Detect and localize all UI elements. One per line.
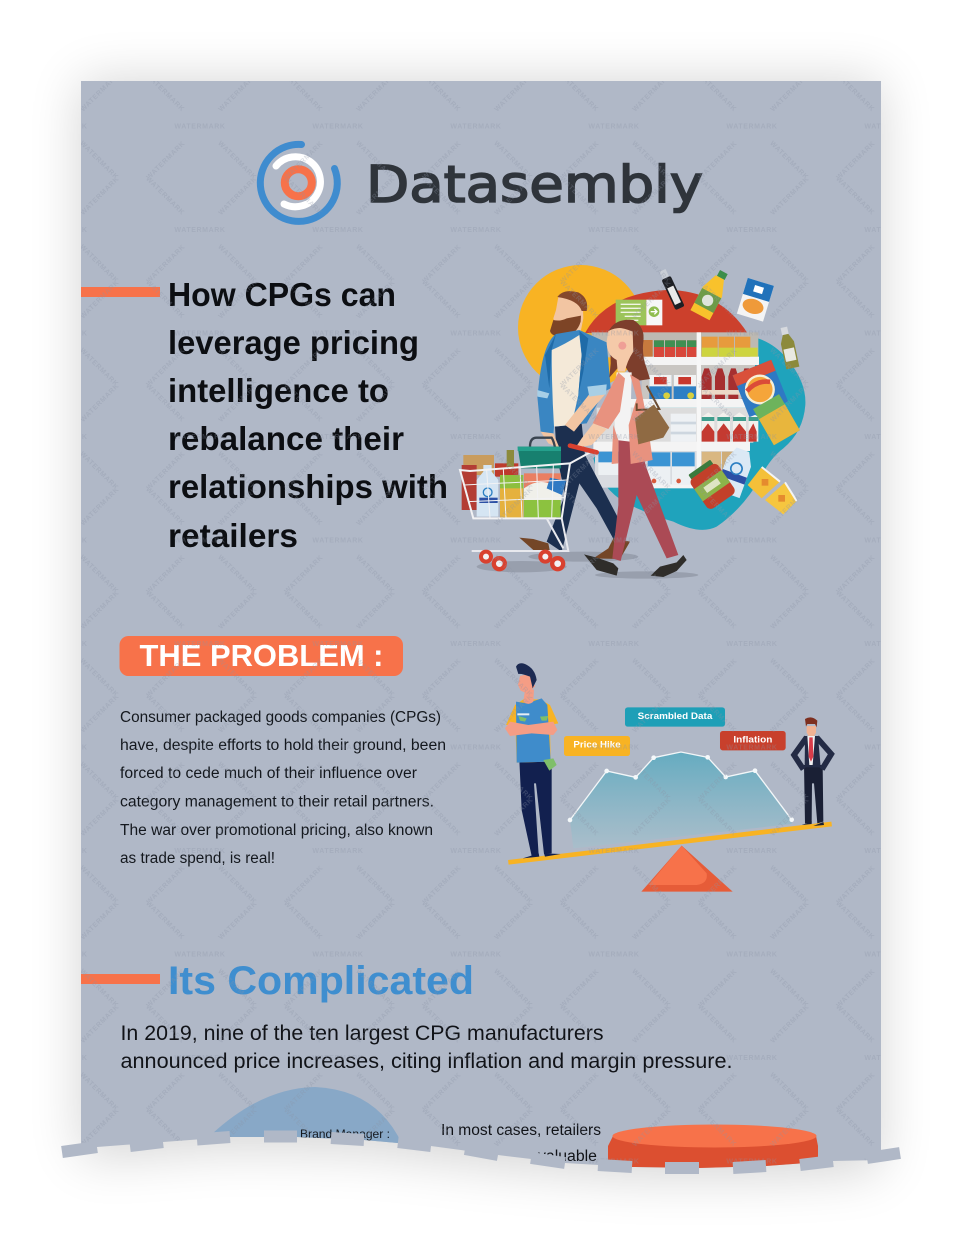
data area chart	[568, 752, 794, 848]
worried man: head	[807, 726, 816, 736]
accent bar: title	[81, 287, 160, 297]
man: cuffs	[587, 384, 607, 397]
label: price hike: Price Hike	[573, 740, 621, 750]
products row 1	[643, 337, 758, 357]
label: scrambled data: Scrambled Data	[638, 711, 713, 721]
man: lapel	[545, 331, 588, 395]
man: hair	[557, 291, 587, 311]
confident man: legs	[519, 760, 552, 856]
shelf sign	[616, 300, 662, 325]
confident man: arms	[505, 722, 557, 736]
products row 4	[598, 452, 740, 484]
man: forearm and hands	[565, 393, 606, 432]
ground shadows	[477, 552, 698, 579]
accent bar: complicated	[81, 974, 160, 984]
red disc	[608, 1124, 818, 1170]
label: scrambled data	[625, 707, 725, 727]
man: face and neck	[553, 297, 584, 331]
label: inflation	[720, 731, 786, 750]
intro paragraph: announced price increases, citing inflation and margin pressure.	[120, 1050, 732, 1073]
man: beard	[550, 316, 581, 337]
seesaw fulcrum	[641, 846, 733, 892]
woman: blouse	[613, 372, 632, 442]
products row 2	[649, 368, 752, 399]
title	[168, 276, 448, 554]
woman: shoes	[584, 554, 687, 577]
paper drop shadow	[81, 81, 881, 1176]
floating: juice bottle	[690, 270, 728, 320]
problem body text: have, despite efforts to hold their ground, been	[120, 737, 446, 754]
woman	[575, 320, 687, 577]
yellow sun circle	[518, 265, 634, 383]
handbag	[637, 386, 659, 410]
text: retailers: In most cases, retailers	[441, 1122, 601, 1139]
problem body text	[120, 709, 446, 867]
title: leverage pricing	[168, 324, 419, 361]
confident man: money	[543, 758, 557, 771]
confident man: shirt	[506, 699, 558, 763]
label: price hike	[564, 736, 630, 756]
title: retailers	[168, 517, 298, 554]
cart: products	[462, 450, 566, 518]
problem body text: Consumer packaged goods companies (CPGs)	[120, 709, 441, 726]
shopping cart	[460, 446, 597, 571]
title: intelligence to	[168, 372, 389, 409]
red dome	[585, 290, 747, 333]
man	[519, 291, 630, 559]
seesaw plank	[508, 824, 832, 862]
woman: trousers	[612, 440, 678, 561]
man: shoes	[519, 538, 630, 559]
problem body text: forced to cede much of their influence over	[120, 765, 417, 782]
confident man	[505, 663, 561, 858]
title: relationships with	[168, 468, 448, 505]
text: retailers	[441, 1122, 601, 1165]
wordmark: Datasembly	[366, 156, 703, 215]
floating: yellow boxes	[748, 467, 797, 514]
floating: pastry packet	[737, 278, 774, 322]
heading: its complicated: Its Complicated	[168, 959, 474, 1003]
cart: handle	[570, 446, 597, 452]
illustration: pricing seesaw	[505, 663, 832, 892]
problem body text: category management to their retail partners.	[120, 794, 434, 810]
logo	[260, 144, 703, 221]
products row 3	[671, 412, 758, 442]
woman: hair front	[608, 320, 644, 342]
watermark overlay	[81, 81, 881, 1171]
man: trousers	[547, 423, 618, 552]
green basket	[518, 438, 561, 468]
title: rebalance their	[168, 420, 404, 457]
teal blob	[593, 335, 805, 530]
label: brand manager: Brand Manager :	[300, 1127, 390, 1141]
floating: oil bottle	[780, 326, 800, 370]
worried man	[794, 717, 831, 826]
floating: black bottle	[658, 268, 685, 310]
blue hill	[212, 1087, 403, 1160]
cart: basket wires	[460, 452, 590, 551]
text: retailers: valuable	[538, 1148, 597, 1165]
label: inflation: Inflation	[733, 735, 772, 745]
shelves	[592, 332, 759, 488]
woman: hair back	[609, 320, 650, 381]
floating: jar	[688, 460, 735, 509]
floating: pasta bag	[753, 394, 800, 445]
worried man: jacket	[805, 736, 821, 767]
floating: chip bag	[733, 360, 788, 417]
torn paper edge	[62, 1136, 900, 1168]
title: How CPGs can	[168, 276, 396, 313]
intro paragraph	[120, 1022, 732, 1073]
confident man: head	[523, 689, 534, 704]
woman: jacket	[593, 372, 653, 464]
problem body text: as trade spend, is real!	[120, 850, 275, 867]
illustration: shoppers in front of shelves	[460, 265, 805, 579]
woman: hand to cart	[575, 423, 607, 448]
man: jacket	[537, 330, 611, 435]
problem body text: The war over promotional pricing, also known	[120, 822, 433, 839]
intro paragraph: In 2019, nine of the ten largest CPG manufacturers	[120, 1022, 604, 1045]
man: shirt	[552, 335, 582, 427]
icon: logo rings	[260, 144, 337, 221]
worried man: legs	[804, 765, 823, 823]
badge: the problem: THE PROBLEM :	[140, 638, 384, 673]
paper content	[81, 81, 881, 1171]
floating: water bottle	[722, 448, 751, 498]
woman: face and neck	[607, 328, 633, 372]
cart: wheels	[479, 550, 565, 571]
paper background	[81, 81, 881, 1168]
